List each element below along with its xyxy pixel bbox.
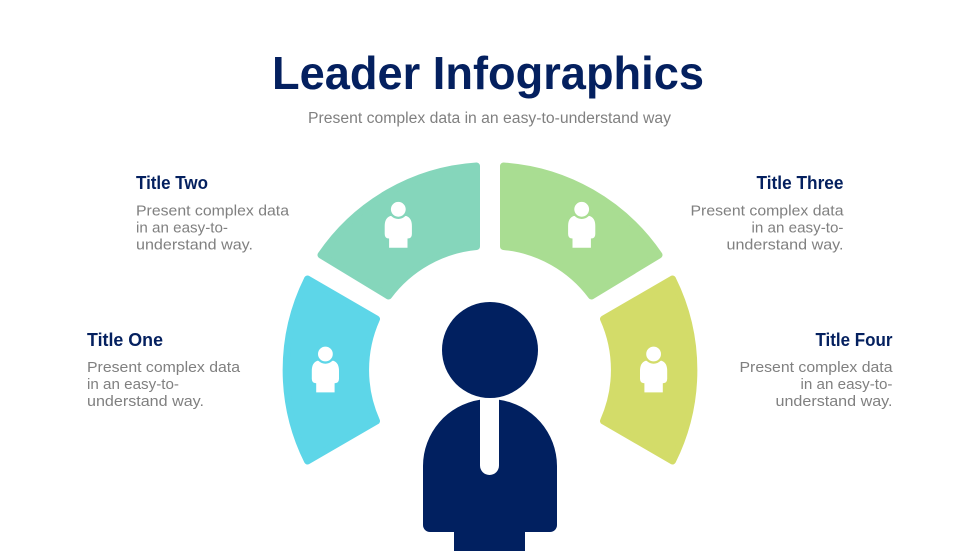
central leader figure	[423, 302, 557, 551]
text block: title three	[690, 173, 844, 254]
text block: title three: Present complex data	[690, 202, 844, 220]
text block: title four: Present complex data	[740, 359, 893, 376]
text block: title one: understand way.	[87, 393, 204, 410]
segment: teal, title two	[321, 166, 476, 296]
text block: title two: Present complex data	[136, 202, 290, 220]
text block: title two: understand way.	[136, 236, 253, 254]
subtitle: Present complex data in an easy-to-understand way	[308, 110, 671, 127]
text block: title one: in an easy-to-	[87, 376, 179, 393]
text block: title two: Title Two	[136, 173, 208, 193]
text block: title four: understand way.	[776, 393, 892, 410]
title: Leader Infographics	[272, 47, 704, 99]
text block: title two	[136, 173, 290, 254]
text block: title two: in an easy-to-	[136, 220, 228, 236]
text block: title three: understand way.	[726, 236, 844, 254]
text block: title four	[740, 330, 893, 410]
text block: title three: Title Three	[756, 173, 844, 193]
leader body	[423, 400, 557, 551]
segment: green, title three	[504, 166, 659, 296]
text block: title three: in an easy-to-	[752, 220, 844, 236]
text block: title four: Title Four	[816, 330, 892, 350]
leader head	[442, 302, 538, 398]
text block: title four: in an easy-to-	[800, 376, 892, 393]
icon: person, yellow-green segment	[640, 344, 667, 392]
segment: blue, title one	[286, 279, 376, 461]
icon: person, green segment	[568, 200, 595, 248]
text block: title one	[87, 330, 241, 410]
icon: person, blue segment	[312, 344, 339, 392]
segment: yellow-green, title four	[604, 279, 694, 461]
text block: title one: Title One	[87, 330, 163, 350]
icon: person, teal segment	[385, 200, 412, 248]
text block: title one: Present complex data	[87, 359, 241, 376]
